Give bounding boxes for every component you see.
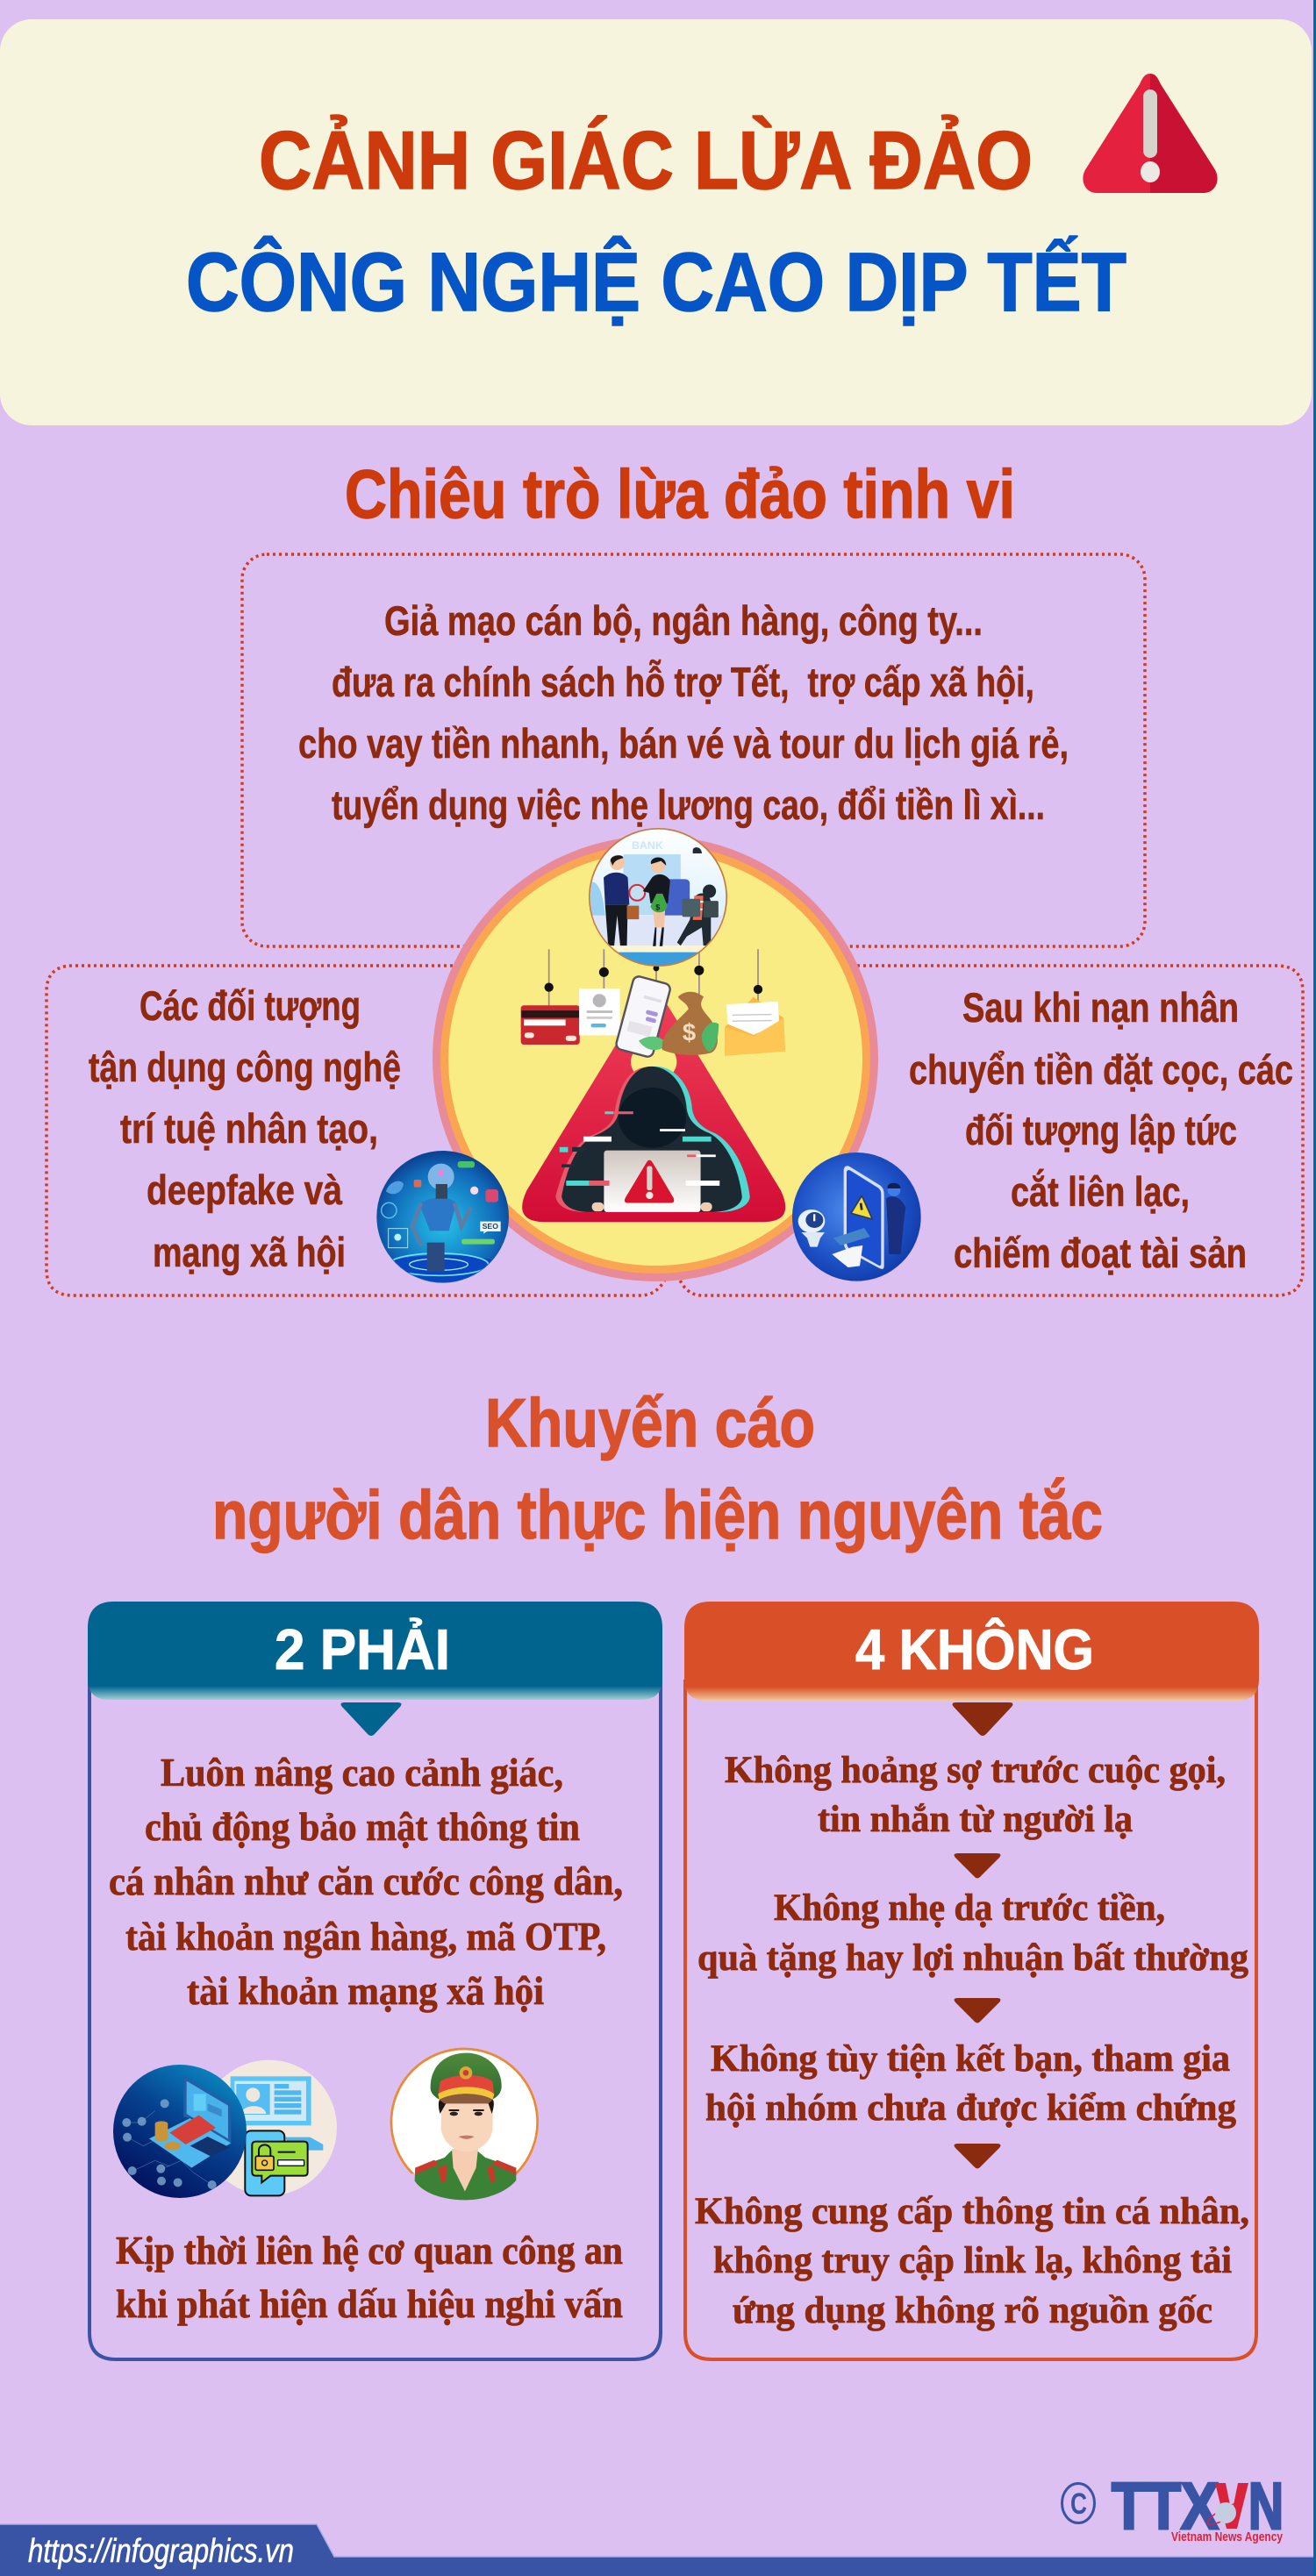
text block: after transfer: Sau khi nạn nhân xyxy=(962,984,1239,1031)
icon: hacker on red warning triangle xyxy=(521,949,785,1222)
panel header: 2 PHẢI xyxy=(88,1602,662,1700)
panel: impersonation tricks xyxy=(242,554,1145,946)
text block: after transfer: chiếm đoạt tài sản xyxy=(954,1230,1247,1276)
logo: TTXVN xyxy=(1062,2469,1284,2544)
arrow xyxy=(341,1702,401,1736)
text block: contact police xyxy=(116,2229,623,2326)
text block: four don'ts: Không nhẹ dạ trước tiền, xyxy=(774,1887,1165,1929)
logo: TTXVN: TTX xyxy=(1112,2469,1219,2543)
panel: 4 KHÔNG xyxy=(684,1602,1259,2359)
text block: four don'ts: Không tùy tiện kết bạn, tham gia xyxy=(711,2038,1230,2080)
text block: impersonation: cho vay tiền nhanh, bán vé và tour du lịch giá rẻ, xyxy=(298,720,1069,767)
text block: after transfer: đối tượng lập tức xyxy=(965,1107,1237,1153)
source url: https://infographics.vn xyxy=(28,2533,294,2570)
text block: four don'ts: quà tặng hay lợi nhuận bất thường xyxy=(697,1937,1248,1979)
footer band xyxy=(0,2524,1313,2576)
icon: hanging lures: $ xyxy=(683,1019,696,1046)
heading: tricks: Chiêu trò lừa đảo tinh vi xyxy=(345,455,1015,532)
text block: impersonation xyxy=(298,597,1069,828)
icon: bank fraud scene xyxy=(590,829,732,970)
text block: four don'ts: hội nhóm chưa được kiểm chứng xyxy=(705,2087,1236,2129)
panel: after transfer xyxy=(676,966,1303,1295)
text block: four don'ts: Không cung cấp thông tin cá nhân, xyxy=(695,2191,1249,2232)
text block: impersonation: đưa ra chính sách hỗ trợ Tết, trợ cấp xã hội, xyxy=(332,659,1034,705)
text block: four don'ts: tin nhắn từ người lạ xyxy=(818,1799,1133,1840)
panel header: 4 KHÔNG xyxy=(684,1602,1259,1701)
text block: contact police: khi phát hiện dấu hiệu nghi vấn xyxy=(116,2282,623,2326)
text block: contact police: Kịp thời liên hệ cơ quan công an xyxy=(116,2229,623,2273)
central circle illustration xyxy=(433,836,878,1281)
panel header: 4 KHÔNG: 4 KHÔNG xyxy=(855,1617,1094,1681)
icon: AI robot: SEO xyxy=(483,1222,498,1231)
logo: TTXVN: Vietnam News Agency xyxy=(1171,2530,1284,2544)
text block: vigilance xyxy=(109,1751,623,2013)
icon: police officer xyxy=(391,2049,538,2200)
panel: AI tactics xyxy=(46,966,669,1295)
icon: bank fraud scene: BANK xyxy=(632,839,663,852)
panel header: 2 PHẢI: 2 PHẢI xyxy=(275,1617,450,1681)
text block: four don'ts xyxy=(695,1750,1249,2331)
text block: four don'ts: ứng dụng không rõ nguồn gốc xyxy=(733,2290,1212,2331)
logo: TTXVN: C xyxy=(1070,2487,1087,2521)
icon: scammer phone xyxy=(792,1152,921,1281)
text block: vigilance: tài khoản mạng xã hội xyxy=(187,1969,544,2013)
text block: vigilance: cá nhân như căn cước công dân, xyxy=(109,1859,623,1903)
panel: title card xyxy=(0,19,1312,425)
text block: after transfer xyxy=(909,984,1293,1276)
text block: AI tactics xyxy=(89,982,401,1275)
text block: after transfer: cắt liên lạc, xyxy=(1011,1168,1190,1215)
heading: recommendations: Khuyến cáo xyxy=(485,1384,815,1461)
icon: data security xyxy=(113,2060,337,2198)
heading line 2: người dân thực hiện nguyên tắc xyxy=(212,1476,1103,1553)
icon: warning triangle xyxy=(1083,74,1218,193)
icon: AI robot xyxy=(376,1151,509,1283)
text block: impersonation: tuyển dụng việc nhẹ lương cao, đổi tiền lì xì... xyxy=(332,781,1045,828)
text block: vigilance: tài khoản ngân hàng, mã OTP, xyxy=(125,1915,606,1959)
text block: AI tactics: tận dụng công nghệ xyxy=(89,1044,401,1090)
text block: vigilance: Luôn nâng cao cảnh giác, xyxy=(161,1751,563,1795)
icon: bank fraud scene: $ xyxy=(655,903,660,911)
arrows xyxy=(953,1702,1012,2168)
logo: TTXVN: N xyxy=(1248,2469,1284,2543)
heading: recommendations xyxy=(212,1384,1103,1553)
text block: four don'ts: không truy cập link lạ, không tải xyxy=(713,2240,1232,2281)
text block: AI tactics: Các đối tượng xyxy=(139,982,361,1029)
title line 1: CẢNH GIÁC LỪA ĐẢO xyxy=(259,114,1033,206)
panel: 2 PHẢI xyxy=(88,1602,662,2359)
text block: four don'ts: Không hoảng sợ trước cuộc gọi, xyxy=(725,1750,1226,1791)
text block: impersonation: Giả mạo cán bộ, ngân hàng, công ty... xyxy=(384,597,983,644)
text block: AI tactics: mạng xã hội xyxy=(153,1229,346,1275)
text block: AI tactics: deepfake và xyxy=(147,1167,343,1213)
icon: hanging lures xyxy=(521,949,785,1058)
text block: AI tactics: trí tuệ nhân tạo, xyxy=(120,1105,378,1152)
title line 2: CÔNG NGHỆ CAO DỊP TẾT xyxy=(186,236,1126,329)
text block: vigilance: chủ động bảo mật thông tin xyxy=(145,1805,580,1849)
